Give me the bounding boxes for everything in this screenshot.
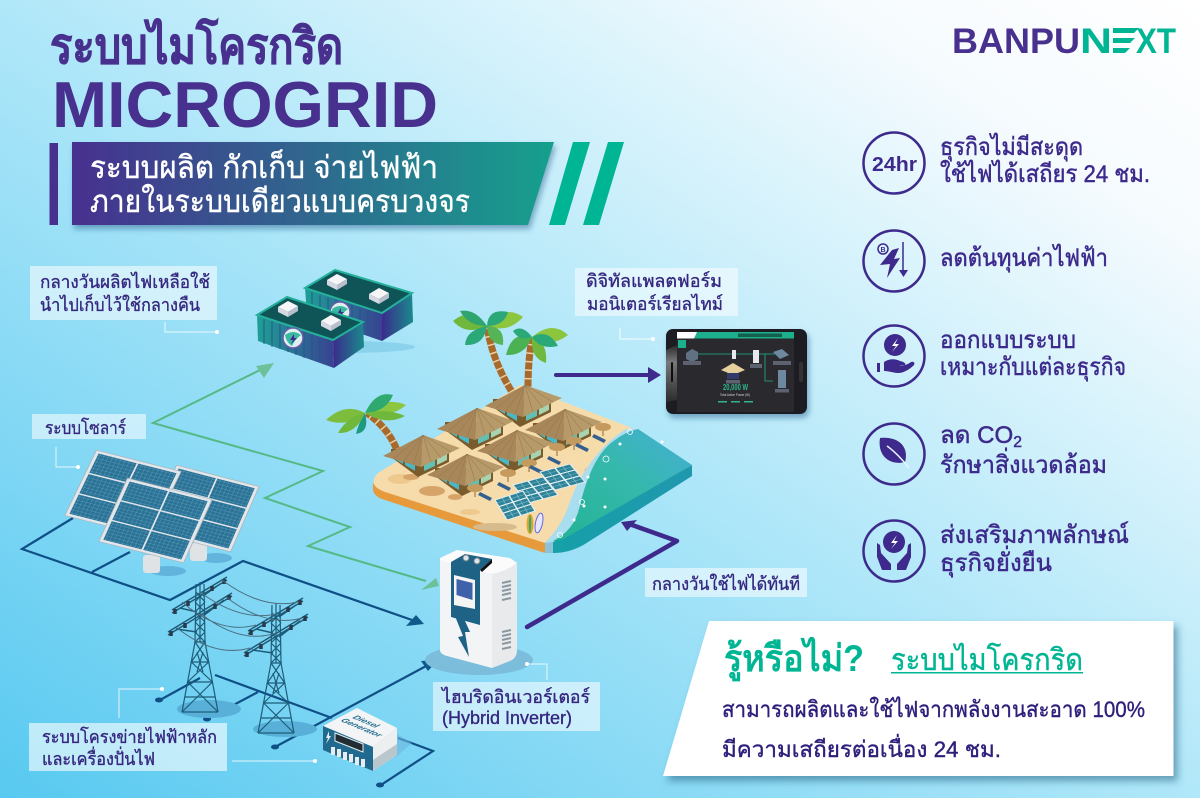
- umbrellas and loungers: [467, 423, 611, 501]
- island base: [373, 483, 545, 553]
- label: main grid and generator: ระบบโครงข่ายไฟฟ้าหลัก: [42, 726, 217, 747]
- callout: did you know: [663, 621, 1174, 776]
- benefit: reduce CO2: 2: [1013, 434, 1022, 451]
- benefit: reduce CO2: [864, 422, 1107, 484]
- logo: Banpu Next: [952, 22, 1176, 61]
- island solar panels: [494, 463, 586, 521]
- benefit: tailored system design: เหมาะกับแต่ละธุรกิจ: [940, 354, 1126, 382]
- illustration: island resort: [326, 311, 692, 553]
- benefit: reduce CO2: ลด CO: [940, 422, 1014, 449]
- water: [553, 465, 692, 553]
- huts: [383, 385, 602, 496]
- icon: hybrid inverter: [425, 550, 533, 675]
- label: excess daytime power stored: นำไปเก็บไว้ใช้กลางคืน: [40, 293, 200, 315]
- logo: Banpu Next: N: [1080, 22, 1112, 61]
- arrow: inverter to island: [527, 520, 677, 627]
- front container: [257, 297, 364, 368]
- benefit: sustainable business image: ส่งเสริมภาพลักษณ์: [940, 521, 1129, 549]
- benefit: sustainable business image: ธุรกิจยั่งยืน: [940, 545, 1052, 578]
- palm trees: [326, 311, 568, 450]
- icon: battery containers: [257, 270, 415, 368]
- banner teal slashes: [549, 142, 590, 225]
- callout heading: รู้หรือไม่?: [724, 636, 864, 682]
- benefit: 24 hours: ธุรกิจไม่มีสะดุด: [940, 133, 1083, 162]
- label: daytime immediate use: กลางวันใช้ไฟได้ทันที: [652, 573, 800, 594]
- title: MICROGRID: MICROGRID: [52, 68, 438, 141]
- label: hybrid inverter: [433, 662, 600, 731]
- icon: transmission towers: [168, 577, 317, 737]
- label: excess daytime power stored: [30, 266, 219, 334]
- callout: did you know: มีความเสถียรต่อเนื่อง 24 ชม.: [722, 733, 1001, 762]
- label: excess daytime power stored: กลางวันผลิตไฟเหลือใช้: [40, 271, 210, 292]
- label: digital monitoring platform: มอนิเตอร์เรียลไทม์: [587, 293, 723, 314]
- benefit: reduce CO2: รักษาสิ่งแวดล้อม: [940, 447, 1107, 479]
- label: digital monitoring platform: [575, 268, 738, 341]
- label: main grid and generator: และเครื่องปั่นไฟ: [42, 746, 155, 769]
- label: main grid and generator: [29, 687, 317, 771]
- benefit: tailored system design: [864, 326, 1126, 386]
- arrow: island to monitoring tablet: [556, 367, 661, 383]
- tablet reading: 20,000 W: [723, 382, 749, 392]
- callout term: ระบบไมโครกริด: [891, 642, 1083, 677]
- tablet header: [677, 332, 794, 338]
- surfboards: [526, 512, 545, 534]
- label: solar system: [32, 414, 146, 469]
- label: daytime immediate use: [645, 568, 807, 597]
- label: hybrid inverter: ไฮบริดอินเวอร์เตอร์: [440, 686, 590, 707]
- subtitle banner: [50, 142, 624, 225]
- banner gradient bar: [72, 142, 554, 225]
- icon: monitoring tablet: [666, 329, 807, 414]
- subtitle banner: ภายในระบบเดียวแบบครบวงจร: [90, 184, 470, 219]
- banner text: ระบบผลิต กักเก็บ จ่ายไฟฟ้า: [90, 149, 438, 185]
- logo: Banpu Next: XT: [1136, 22, 1176, 61]
- benefit: lower electricity cost: B: [880, 247, 886, 254]
- title: Thai heading: ระบบไมโครกริด: [50, 17, 343, 74]
- label: solar system: ระบบโซลาร์: [45, 417, 126, 438]
- label: hybrid inverter: (Hybrid Inverter): [442, 708, 572, 728]
- benefit: 24 hours: [864, 132, 1150, 194]
- callout body: สามารถผลิตและใช้ไฟจากพลังงานสะอาด 100%: [722, 696, 1145, 722]
- icon: monitoring tablet: Total Active Power (W): [720, 393, 750, 397]
- benefit: tailored system design: ออกแบบระบบ: [940, 327, 1076, 354]
- diagram: green power lines: [153, 363, 439, 590]
- diagram: blue grid lines: [22, 518, 438, 788]
- icon: diesel generator: Diesel: [350, 714, 383, 729]
- title block: [50, 17, 438, 141]
- benefit: 24 hours: ใช้ไฟได้เสถียร 24 ชม.: [940, 160, 1150, 188]
- back container: [305, 270, 413, 341]
- banner left stripe: [50, 143, 58, 225]
- benefit: lower electricity cost: [864, 230, 1108, 292]
- logo: Banpu Next: BANPU: [952, 22, 1080, 61]
- icon: diesel generator: Generator: [338, 717, 386, 739]
- icon: diesel generator: [323, 708, 412, 771]
- label: digital monitoring platform: ดิจิทัลแพลตฟอร์ม: [586, 271, 722, 291]
- benefit: 24 hours: 24hr: [872, 154, 917, 176]
- tablet flow diagram: [695, 354, 775, 381]
- icon: solar panels: [65, 450, 259, 576]
- benefit: lower electricity cost: ลดต้นทุนค่าไฟฟ้า: [940, 244, 1108, 273]
- benefit: sustainable business image: [864, 520, 1129, 582]
